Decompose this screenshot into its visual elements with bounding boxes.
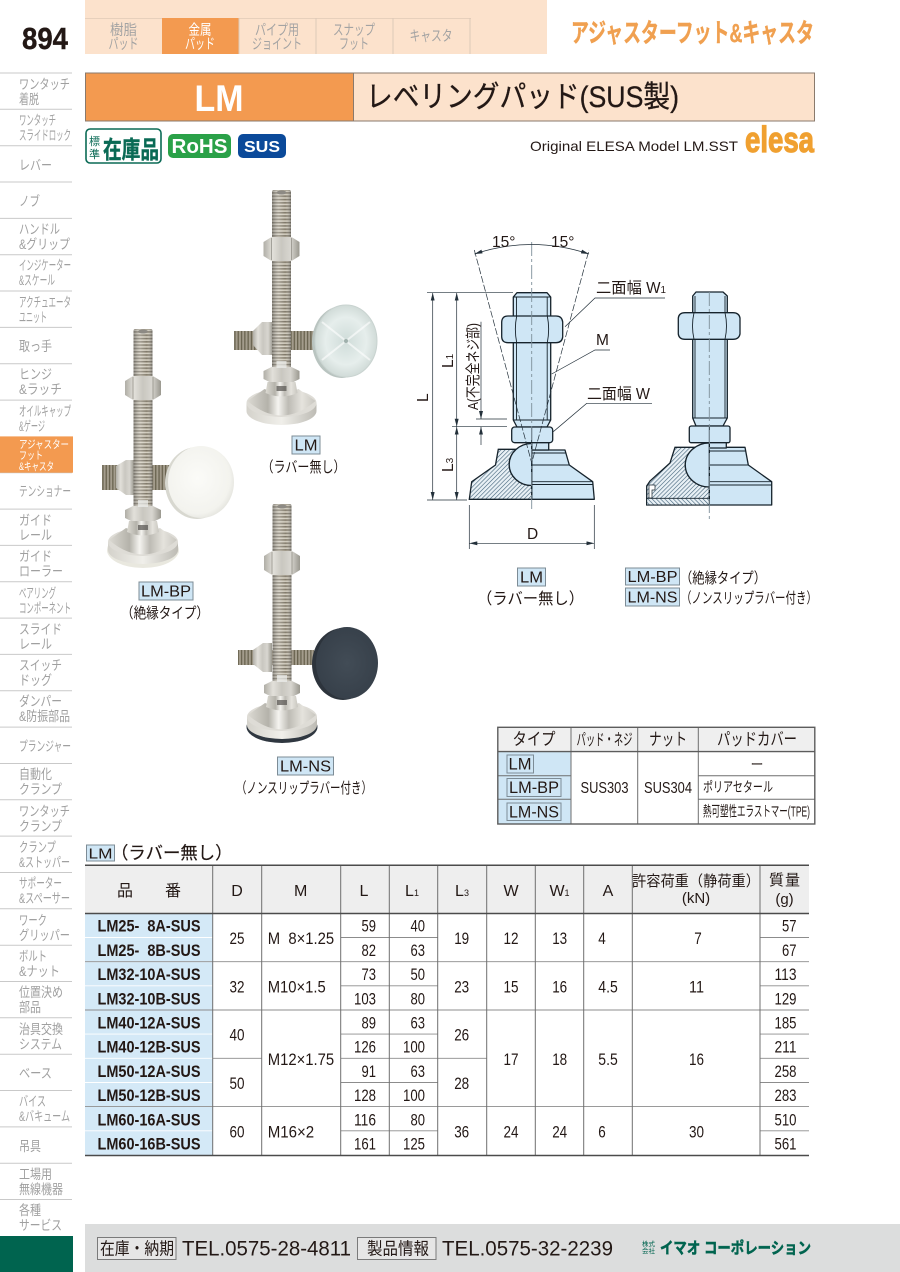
footer contact bar: 在庫・納期 [100,1240,174,1258]
material table: ー [750,757,764,772]
drawing caption: LM-NS: LM-NS [628,590,678,606]
caption: LM-NS photo: LM-NS [280,758,331,776]
side navigation: 取っ手 [19,339,52,354]
technical drawing: LM: L1 [440,353,457,368]
dimensions table: 16 [552,977,567,996]
technical drawing: LM: 15° [551,234,574,251]
dimensions table: M16×2 [268,1122,314,1141]
drawing caption: LM-NS: （ノンスリップラバー付き） [681,590,817,607]
dimensions table: M [294,883,307,900]
category tabs: スナップ [333,22,375,39]
badge: SUS: SUS [244,139,280,156]
dimensions table: 89 [362,1014,376,1032]
dimensions table: L3 [455,883,469,900]
side navigation: 治具交換 [19,1022,63,1037]
side navigation: 無線機器 [19,1182,63,1197]
material table: LM-NS [509,802,559,822]
dimensions table: 67 [782,941,796,960]
dimensions table: 80 [410,1110,425,1129]
side navigation: サービス [19,1218,62,1233]
dimensions table: 6 [598,1122,606,1141]
drawing caption: LM-BP: LM-BP [628,569,678,586]
side navigation: 吊具 [19,1139,41,1154]
side navigation: スライドロック [19,128,71,143]
side navigation: ワーク [19,913,47,928]
material table: SUS303 [580,780,629,797]
side navigation: &バキューム [19,1109,70,1124]
dimensions table: (g) [775,891,794,908]
dimensions table: M12×1.75 [268,1050,334,1069]
dimensions table: LM50-12B-SUS [98,1086,200,1105]
dimensions table: 57 [782,917,796,936]
technical drawing: LM: L3 [440,457,457,472]
technical drawing: LM [415,234,666,549]
footer contact bar: TEL.0575-32-2239 [442,1238,613,1260]
side navigation: 工場用 [19,1167,52,1182]
caption: LM photo [262,436,346,476]
side navigation: &スペーサー [19,891,70,906]
side navigation: 位置決め [19,985,63,1000]
dimensions table: 185 [774,1014,796,1032]
material table: SUS304 [644,780,692,797]
footer contact bar [85,1224,900,1272]
dimensions table: 23 [454,977,469,996]
dimensions table: LM50-12A-SUS [98,1062,200,1081]
drawing caption: LM [477,568,584,608]
dimensions table: 12 [504,929,518,948]
side navigation: ボルト [19,949,47,964]
dimensions table: 113 [774,965,796,984]
side navigation: クランプ [19,819,62,834]
side navigation: ワンタッチ [19,804,70,819]
dimensions table: M10×1.5 [268,977,326,996]
table caption: （ラバー無し） [111,843,233,863]
photo: LM [234,190,377,425]
photo: LM-BP [102,329,234,568]
badge: standard stock: 準 [89,147,100,161]
side navigation: アジャスター [19,438,69,451]
dimensions table: 4.5 [598,977,618,996]
technical drawing: LM-BP and LM-NS [647,292,772,520]
dimensions table: 63 [410,1014,425,1032]
material table: ポリアセタール [703,779,773,795]
side navigation: ベアリング [19,586,56,601]
side navigation: フット [19,450,43,462]
side navigation: サポーター [19,876,62,891]
category tabs: キャスタ [410,28,452,45]
dimensions table: 40 [410,917,425,936]
category tabs: ジョイント [252,37,302,53]
dimensions table: 17 [504,1050,518,1069]
drawing caption: LM-BP [626,568,766,587]
category tabs: パイプ用 [255,22,299,39]
dimensions table: M 8×1.25 [268,929,334,948]
side navigation: &ラッチ [19,382,62,397]
table caption: LM [88,846,112,862]
caption: LM-NS photo [236,757,372,797]
side navigation: ベース [19,1066,52,1081]
side navigation: アクチュエータ [19,295,71,310]
side navigation: スイッチ [19,658,62,673]
category tabs: パッド [108,36,138,53]
dimensions table: 59 [362,917,376,936]
side navigation: &ゲージ [19,419,45,434]
side navigation: バイス [19,1094,46,1109]
dimensions table: LM40-12A-SUS [98,1014,200,1032]
dimensions table: 許容荷重（静荷重） [632,873,760,890]
dimensions table: 番 [165,882,181,900]
dimensions table: 質量 [769,871,800,889]
side navigation: スライド [19,622,62,637]
side navigation: レバー [19,158,52,173]
dimensions table: 73 [362,965,376,984]
side navigation [0,73,73,1272]
dimensions table: 103 [354,989,376,1008]
side navigation: グリッパー [19,928,70,943]
dimensions table: 18 [552,1050,567,1069]
dimensions table: 11 [689,977,704,996]
category tabs [85,0,547,54]
dimensions table: 100 [403,1038,425,1057]
badge: RoHS: RoHS [172,136,228,158]
side navigation: ヒンジ [19,367,52,382]
dimensions table: 36 [454,1122,469,1141]
caption: LM-BP photo: （絶縁タイプ） [121,605,209,622]
side navigation: ワンタッチ [19,113,56,128]
dimensions table: LM60-16A-SUS [98,1110,200,1129]
side navigation: ガイド [19,549,52,564]
dimensions table: 126 [354,1038,376,1057]
category tabs: 樹脂 [110,22,137,39]
dimensions table: 16 [689,1050,704,1069]
side navigation: 自動化 [19,767,52,782]
side navigation: 各種 [19,1203,41,1218]
material table [498,727,815,824]
side navigation: クランプ [19,840,56,855]
dimensions table: 品 [117,883,133,900]
technical drawing: LM: 二面幅 W1 [596,279,666,297]
side navigation: &スケール [19,273,55,288]
dimensions table: 258 [774,1062,796,1081]
footer contact bar: 株式 [642,1239,656,1248]
dimensions table: W1 [549,883,570,900]
side navigation: &ナット [19,964,60,979]
dimensions table: 13 [552,929,567,948]
dimensions table: 283 [774,1086,796,1105]
drawing caption: LM-NS [626,588,817,607]
photo: LM-NS [238,504,378,743]
dimensions table: 116 [354,1110,376,1129]
footer contact bar: TEL.0575-28-4811 [182,1238,351,1260]
product header bar: レベリングパッド(SUS製) [366,81,679,114]
material table: LM [508,754,532,774]
side navigation: 部品 [19,1000,41,1015]
dimensions table: D [231,883,243,900]
dimensions table: L1 [405,883,419,900]
dimensions table: 561 [774,1134,796,1154]
product header bar [86,73,814,121]
elesa logo: elesa [745,119,815,160]
product header bar: LM [194,78,244,119]
dimensions table: 40 [230,1026,244,1045]
side navigation: &ストッパー [19,855,70,870]
technical drawing: LM: 二面幅 W [587,385,650,403]
category tabs: パッド [185,36,215,53]
side navigation: ノブ [19,193,40,209]
dimensions table: 510 [774,1110,796,1129]
badge: standard stock [86,129,161,164]
dimensions table: 32 [230,977,244,996]
dimensions table: LM32-10B-SUS [98,989,200,1008]
side navigation: コンポーネント [19,601,71,616]
footer contact bar: イマオ コーポレーション [660,1240,811,1258]
material table: パッドカバー [717,730,797,749]
technical drawing: LM: M [596,332,609,349]
dimensions table: A [603,883,614,900]
technical drawing: LM: A(不完全ネジ部) [465,323,482,410]
dimensions table: LM32-10A-SUS [98,965,200,984]
dimensions table: 129 [774,989,796,1008]
dimensions table: LM25- 8A-SUS [98,917,200,936]
dimensions table: 4 [598,929,606,948]
side navigation: レール [19,637,52,652]
dimensions table [85,865,809,1156]
side navigation: ハンドル [19,222,60,237]
dimensions table: 63 [410,1062,425,1081]
side navigation: クランプ [19,782,62,797]
dimensions table: 82 [362,941,376,960]
technical drawing: LM: 15° [492,234,515,251]
dimensions table: W [503,883,519,900]
side navigation: インジケーター [19,258,71,273]
dimensions table: 60 [230,1122,244,1141]
caption: LM photo: LM [294,438,318,454]
side navigation: ローラー [19,564,63,579]
dimensions table: LM25- 8B-SUS [98,941,200,960]
side navigation: ユニット [19,310,47,325]
dimensions table: 161 [354,1134,376,1154]
dimensions table: 50 [410,965,425,984]
dimensions table: 24 [552,1122,567,1141]
dimensions table: 63 [410,941,425,960]
side navigation: レール [19,528,52,543]
side navigation: 着脱 [19,91,39,107]
material table: タイプ [512,730,556,749]
caption: LM-BP photo [121,582,209,622]
side navigation: ワンタッチ [19,77,70,92]
drawing caption: LM: LM [520,570,543,586]
dimensions table: 7 [694,929,702,948]
side navigation: プランジャー [19,739,71,754]
material table: パッド・ネジ [576,731,632,749]
side navigation: &グリップ [19,237,70,252]
footer contact bar: 製品情報 [367,1240,429,1258]
dimensions table: 80 [410,989,425,1008]
side navigation: システム [19,1037,62,1052]
badge: SUS [238,134,286,158]
dimensions table: 211 [774,1038,796,1057]
dimensions table: 128 [354,1086,376,1105]
dimensions table: 125 [403,1134,425,1154]
dimensions table: 91 [362,1062,376,1081]
drawing caption: LM-BP: （絶縁タイプ） [680,570,766,587]
material table: ナット [649,730,687,749]
caption: LM photo: （ラバー無し） [262,459,346,476]
material table: 熱可塑性エラストマー(TPE) [703,804,810,820]
side navigation: テンショナー [19,484,71,499]
side navigation: ガイド [19,513,52,528]
dimensions table: 26 [454,1026,469,1045]
category tabs: フット [339,37,369,53]
side navigation: ドッグ [19,673,52,688]
dimensions table: L [360,883,369,900]
side navigation: ダンパー [19,694,62,709]
dimensions table: 15 [504,977,518,996]
drawing caption: LM: （ラバー無し） [477,590,584,608]
original model text: Original ELESA Model LM.SST [530,138,738,154]
dimensions table: LM40-12B-SUS [98,1038,200,1057]
dimensions table: 24 [504,1122,518,1141]
dimensions table: 25 [230,929,244,948]
footer contact bar: 会社 [642,1246,656,1255]
badge: standard stock: 在庫品 [103,137,159,164]
dimensions table: 50 [230,1074,244,1093]
dimensions table: 5.5 [598,1050,618,1069]
side navigation: オイルキャップ [19,404,71,419]
badge: standard stock: 標 [89,134,100,148]
technical drawing: LM: L [415,393,432,402]
dimensions table: 30 [689,1122,704,1141]
category tabs: 金属 [188,22,212,39]
caption: LM-NS photo: （ノンスリップラバー付き） [236,780,372,797]
side navigation: &防振部品 [19,709,70,724]
side navigation: &キャスタ [19,460,54,473]
dimensions table: 19 [454,929,469,948]
dimensions table: LM60-16B-SUS [98,1134,200,1154]
technical drawing: LM: D [527,526,538,543]
material table: LM-BP [509,778,559,797]
caption: LM-BP photo: LM-BP [141,584,191,600]
page number: 894 [22,21,69,56]
dimensions table: (kN) [682,890,710,907]
dimensions table: 28 [454,1074,469,1093]
dimensions table: 100 [403,1086,425,1105]
